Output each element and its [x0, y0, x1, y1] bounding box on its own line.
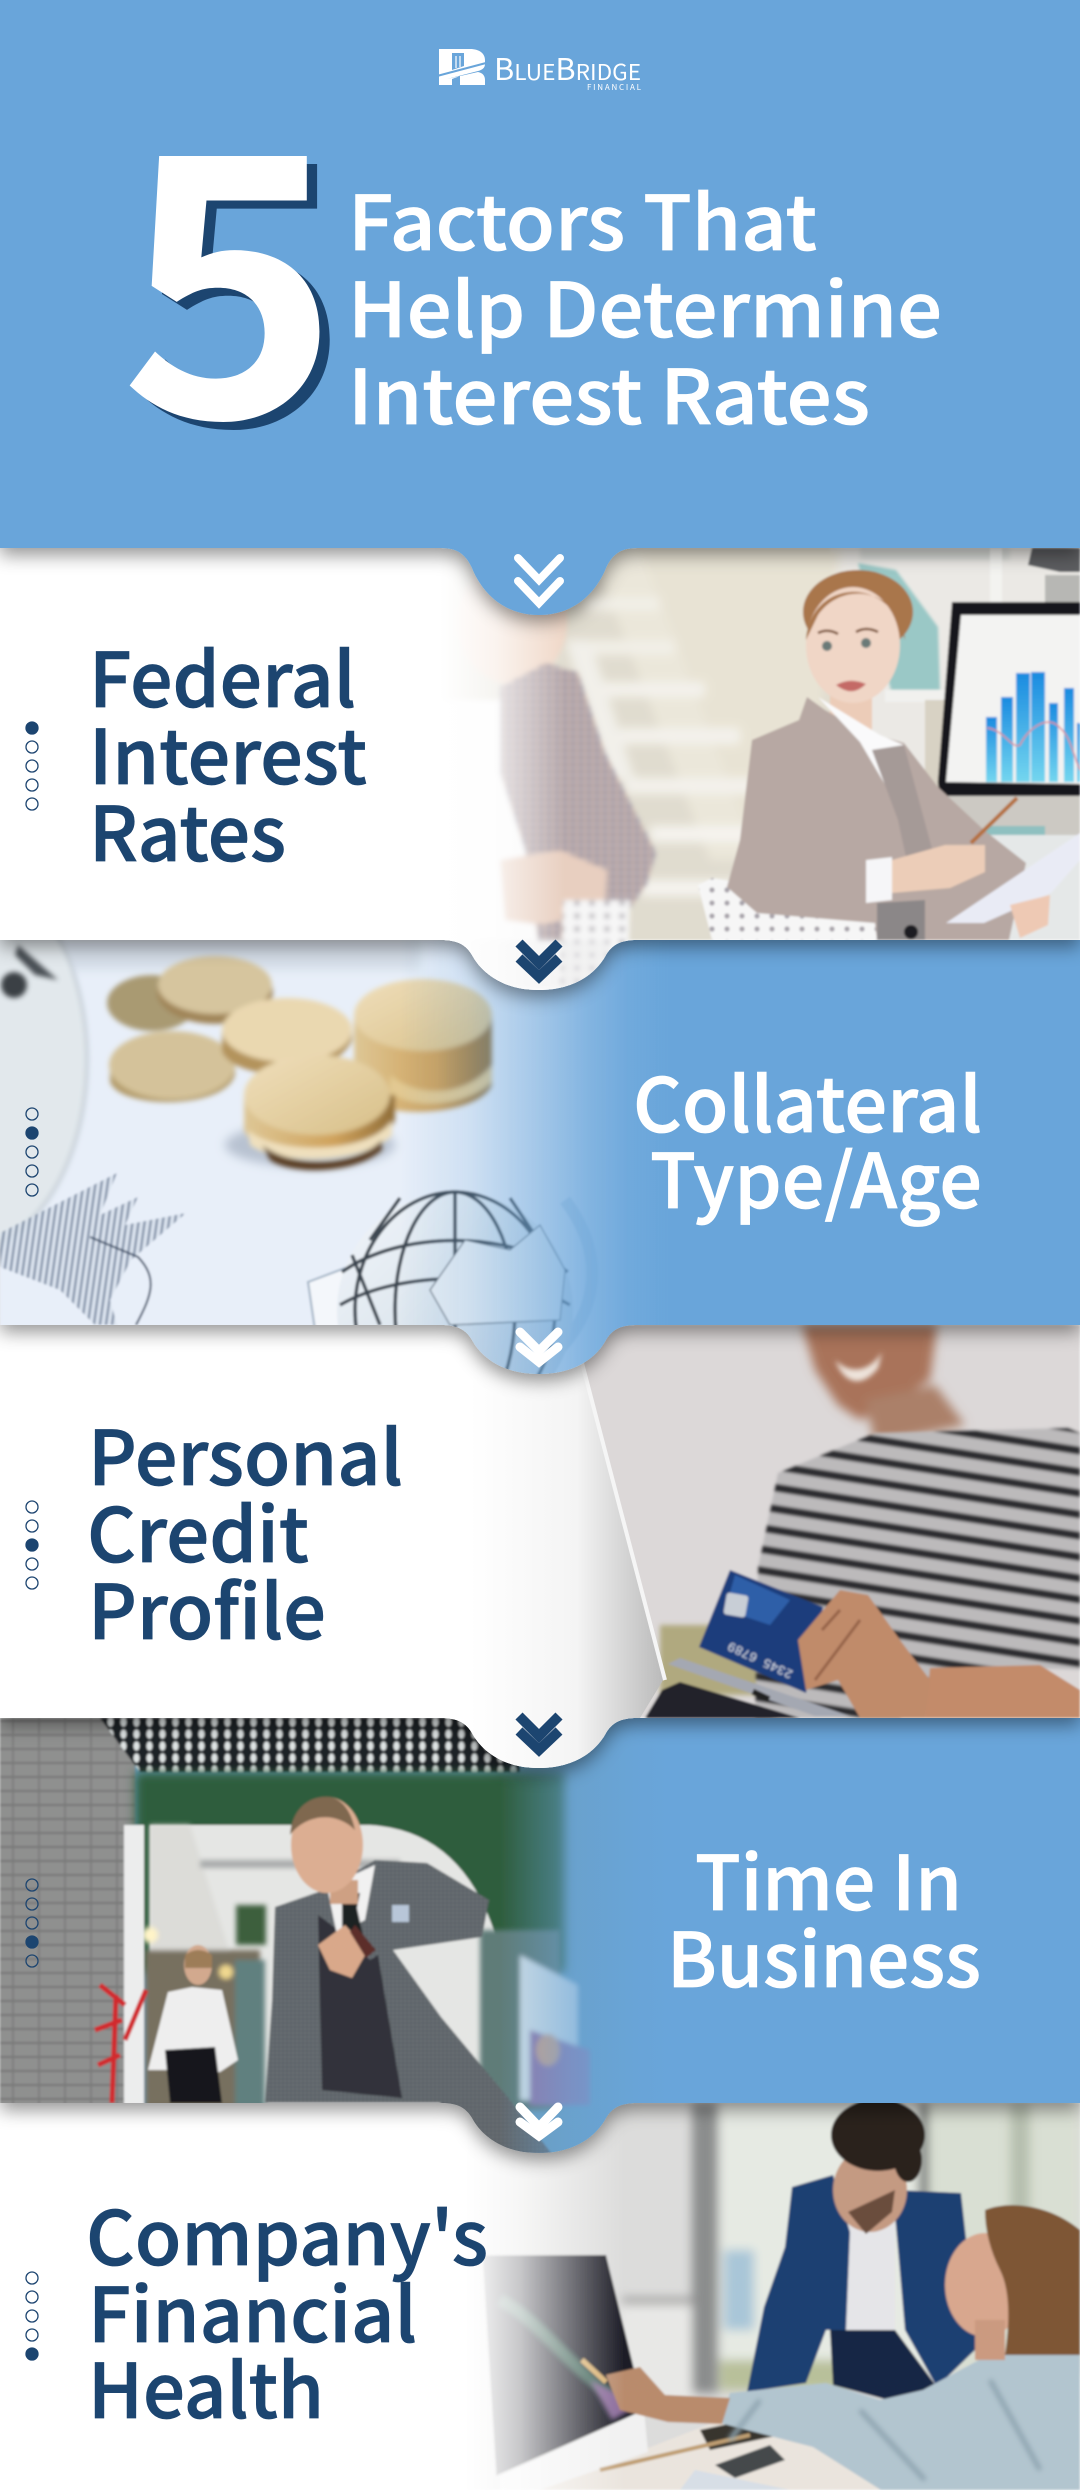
- heading: Federal Interest Rates: Rates: [89, 774, 286, 883]
- panel: factor 4 time in business: [0, 1718, 1080, 2154]
- heading: Federal Interest Rates: Interest: [89, 697, 367, 806]
- striped shirt: [755, 1428, 1080, 1718]
- panel: factor 5 company's financial health: [0, 2099, 1080, 2490]
- big number 5: 5: [130, 5, 350, 529]
- red coat rack: [95, 1985, 146, 2103]
- icon: white chevrons: [520, 2107, 558, 2136]
- panel: header: [0, 0, 1080, 615]
- seated woman: [720, 2348, 1080, 2490]
- lamp: [1028, 548, 1080, 572]
- section indicator dots: [26, 1879, 38, 1967]
- photo: two colleagues in an office with a chart monitor: [430, 548, 1080, 990]
- icon: navy chevrons: [519, 1716, 559, 1750]
- stairs: [565, 548, 840, 896]
- icon: white chevrons: [518, 558, 560, 603]
- woman: [830, 690, 872, 740]
- heading: Company's Financial Health: [86, 2178, 488, 2440]
- photo: woman paying online with a credit card: [560, 1325, 1080, 1718]
- heading: Time In Business: [667, 1823, 981, 2009]
- laptop lid: [0, 1325, 665, 1769]
- title: Factors That: [348, 163, 817, 272]
- hand: [798, 1590, 930, 1718]
- man with check jacket: [440, 560, 656, 990]
- heading: Personal Credit Profile: Credit: [87, 1475, 309, 1584]
- panel: factor 1 federal interest rates: [0, 548, 1080, 990]
- logo: BlueBridge Financial: [437, 45, 642, 93]
- standing man: [844, 2213, 895, 2335]
- silver globe: [308, 1268, 400, 1376]
- heading: Time In Business: Time In: [695, 1823, 962, 1932]
- arm: [925, 1665, 1080, 1718]
- title: Help Determine: [348, 250, 942, 359]
- heading: Federal Interest Rates: Federal: [89, 620, 356, 729]
- section indicator dots: [26, 2272, 38, 2360]
- coin shadows: [225, 1123, 395, 1167]
- photo: businessman checking his watch: [0, 1718, 720, 2154]
- photo: woman paying online with a credit card: 2345 6789: [725, 1638, 795, 1681]
- heading: Collateral Type/Age: Collateral: [633, 1045, 982, 1154]
- panel: factor 3 personal credit profile: [0, 1325, 1080, 1769]
- logo: BlueBridge Financial: FINANCIAL: [587, 82, 642, 93]
- heading: Collateral Type/Age: [633, 1045, 982, 1230]
- icon: navy chevrons: [519, 943, 559, 977]
- title: [348, 163, 942, 446]
- heading: Company's Financial Health: Company's: [86, 2178, 488, 2287]
- monitor: [482, 2255, 644, 2476]
- heading: Company's Financial Health: Health: [88, 2331, 324, 2440]
- heading: Personal Credit Profile: [87, 1398, 403, 1661]
- heading: Collateral Type/Age: Type/Age: [650, 1121, 982, 1230]
- heading: Personal Credit Profile: Personal: [88, 1398, 403, 1507]
- desk: [965, 835, 1080, 940]
- chair: [698, 878, 877, 940]
- logo: BlueBridge Financial: BLUEBRIDGE: [494, 45, 641, 89]
- laptop base: [645, 1682, 800, 1718]
- heading: Personal Credit Profile: Profile: [88, 1552, 326, 1661]
- panel: factor 2 collateral type/age: [0, 870, 1080, 1428]
- folder: [858, 563, 940, 690]
- section indicator dots: [26, 1108, 38, 1196]
- woman walking: [184, 1945, 212, 1985]
- bar chart on paper: [0, 1173, 186, 1325]
- heading: Federal Interest Rates: [89, 620, 367, 883]
- icon: white chevrons: [520, 1332, 558, 1362]
- face and neck: [802, 1325, 965, 1445]
- section indicator dots: [26, 722, 38, 810]
- big number 5: 5: [120, 0, 340, 521]
- monitor: [900, 795, 1080, 835]
- title: Interest Rates: [348, 337, 870, 446]
- coins: [107, 956, 492, 1170]
- heading: Time In Business: Business: [667, 1900, 981, 2009]
- curved white object: [0, 870, 87, 1250]
- man in suit: [265, 1860, 552, 2154]
- card: [699, 1570, 823, 1693]
- section indicator dots: [26, 1501, 38, 1589]
- heading: Company's Financial Health: Financial: [88, 2255, 417, 2364]
- photo: coins, globe and charts: [0, 870, 1080, 1428]
- photo: colleagues reviewing a monitor: [440, 2099, 1080, 2490]
- desk: [566, 2424, 878, 2490]
